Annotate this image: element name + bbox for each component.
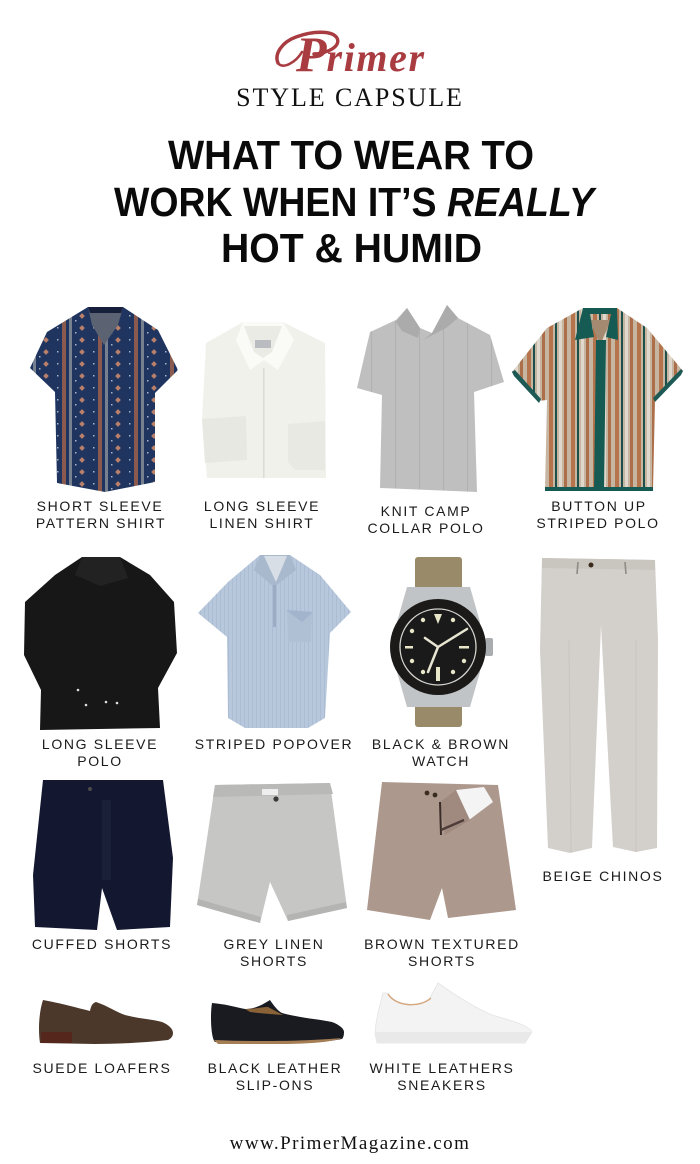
item: long sleeve polo xyxy=(24,557,177,769)
item: long sleeve linen shirt xyxy=(202,322,326,531)
item: knit camp collar polo: KNIT CAMP xyxy=(381,503,471,519)
item: cuffed shorts: CUFFED SHORTS xyxy=(32,936,172,952)
subtitle: Style Capsule: STYLE CAPSULE xyxy=(236,83,464,112)
item: button up striped polo xyxy=(512,308,683,531)
item: white leather sneakers: SNEAKERS xyxy=(397,1077,487,1093)
item: black leather slip-ons: SLIP-ONS xyxy=(236,1077,314,1093)
item: brown textured shorts: BROWN TEXTURED xyxy=(364,936,520,952)
logo: Primer: Primer xyxy=(295,26,426,82)
item: long sleeve polo: LONG SLEEVE xyxy=(42,736,158,752)
item: black leather slip-ons: BLACK LEATHER xyxy=(208,1060,342,1076)
title: WORK WHEN IT’S REALLY xyxy=(114,179,597,225)
title: HOT & HUMID xyxy=(221,225,482,271)
title xyxy=(114,132,597,271)
item: long sleeve linen shirt: LINEN SHIRT xyxy=(209,515,315,531)
item: black and brown watch: BLACK & BROWN xyxy=(372,736,510,752)
item: button up striped polo: STRIPED POLO xyxy=(536,515,660,531)
item: beige chinos xyxy=(540,558,663,884)
item: suede loafers: SUEDE LOAFERS xyxy=(33,1060,171,1076)
item: grey linen shorts: GREY LINEN xyxy=(223,936,325,952)
item: striped popover: STRIPED POPOVER xyxy=(195,736,353,752)
item: long sleeve linen shirt: LONG SLEEVE xyxy=(204,498,320,514)
item: striped popover xyxy=(195,555,353,752)
item: suede loafers xyxy=(33,1000,173,1076)
item: knit camp collar polo xyxy=(357,305,504,536)
item: beige chinos: BEIGE CHINOS xyxy=(543,868,663,884)
item: long sleeve polo: POLO xyxy=(77,753,123,769)
item: cuffed shorts xyxy=(32,780,173,952)
footer url: www.PrimerMagazine.com xyxy=(230,1133,470,1154)
item: knit camp collar polo: COLLAR POLO xyxy=(368,520,484,536)
item: white leather sneakers: WHITE LEATHERS xyxy=(370,1060,514,1076)
item: brown textured shorts: SHORTS xyxy=(408,953,476,969)
title: WHAT TO WEAR TO xyxy=(168,132,534,178)
item: brown textured shorts xyxy=(364,782,520,969)
item: grey linen shorts xyxy=(197,783,347,969)
item: grey linen shorts: SHORTS xyxy=(240,953,308,969)
item: black and brown watch: WATCH xyxy=(412,753,470,769)
item: short sleeve pattern shirt xyxy=(30,307,178,531)
item: short sleeve pattern shirt: PATTERN SHIRT xyxy=(36,515,166,531)
item: black and brown watch xyxy=(372,557,510,769)
item: button up striped polo: BUTTON UP xyxy=(551,498,647,514)
item: white leather sneakers xyxy=(370,983,532,1093)
item: black leather slip-ons xyxy=(208,1000,344,1093)
item: short sleeve pattern shirt: SHORT SLEEVE xyxy=(37,498,163,514)
